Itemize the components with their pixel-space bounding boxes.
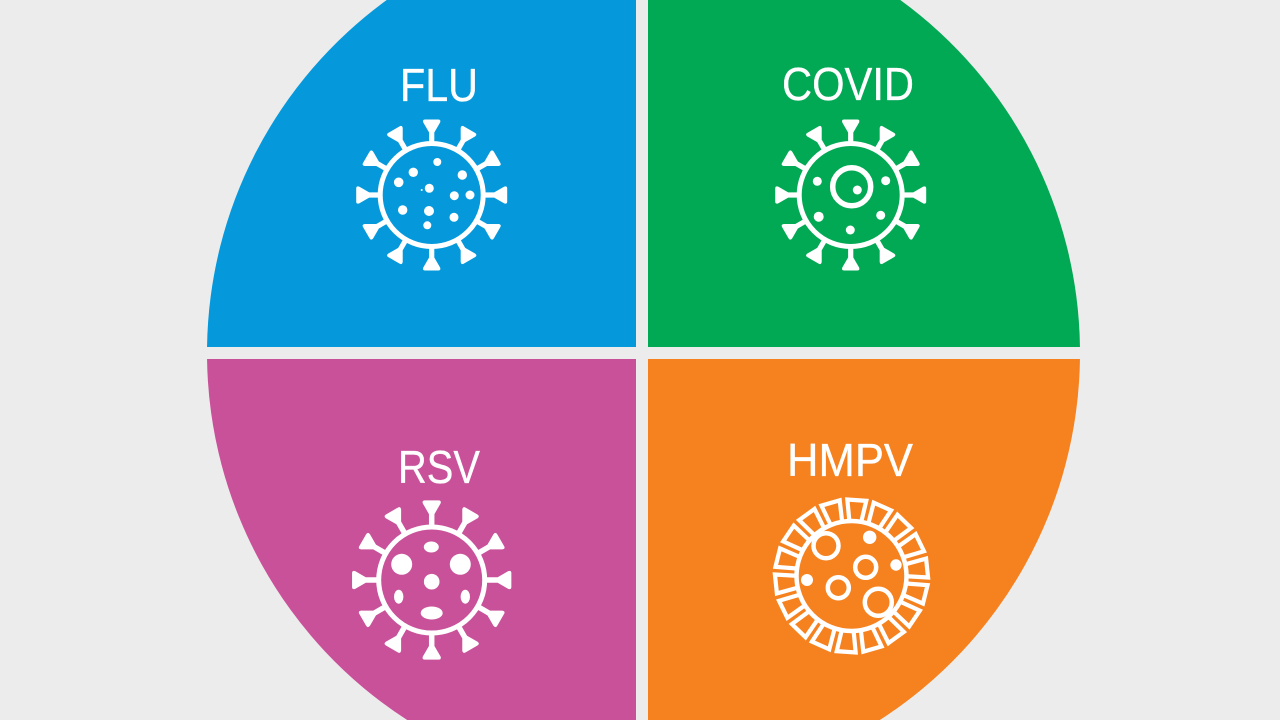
icon: hmpv virus [770,495,933,657]
quadrant: covid green [648,0,1080,347]
panel: RSV [207,359,636,720]
heading: RSV: RSV [398,441,480,493]
icon: covid virus [775,120,926,270]
panel: COVID [648,0,1080,347]
icon: flu virus [356,120,507,270]
icon: rsv virus [352,500,511,660]
heading: HMPV: HMPV [787,434,913,486]
panel: HMPV [648,359,1080,720]
quadrant: hmpv orange [648,359,1080,720]
quadrant: rsv magenta [207,359,636,720]
quadrant: flu blue [207,0,636,347]
heading: FLU: FLU [400,59,478,111]
panel: FLU [207,0,636,347]
heading: COVID: COVID [782,58,914,110]
